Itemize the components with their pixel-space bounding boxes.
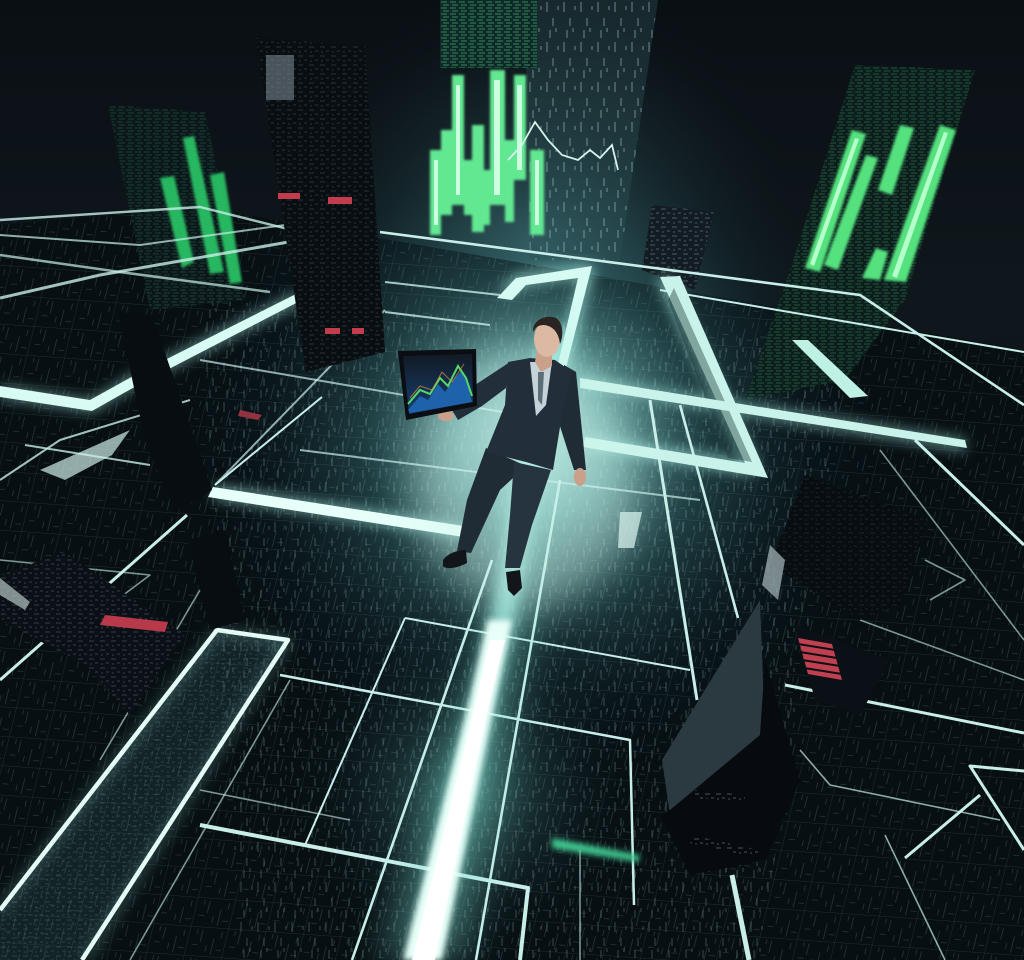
- building: lower right dark slab: [660, 600, 800, 875]
- shoes: [443, 550, 522, 596]
- jacket: [486, 358, 572, 470]
- hand right: [574, 468, 586, 486]
- arm right: [558, 365, 586, 470]
- neck and head: [533, 317, 562, 372]
- building: left green hologram tower: [108, 105, 245, 310]
- accents: green floor glow: [552, 512, 642, 862]
- shirt: [530, 362, 552, 416]
- figure: businesswoman with tablet: [398, 317, 586, 596]
- hand left: [438, 411, 454, 421]
- floor grid: thin glowing lines: [0, 207, 1024, 960]
- legs: [457, 448, 551, 568]
- building: red-lit server block: [795, 625, 890, 715]
- panel: large glass strip, lower left: [0, 630, 288, 960]
- building: mid left dark tower: [118, 312, 245, 630]
- arm left: [452, 362, 510, 420]
- building: right dark cube: [762, 475, 928, 620]
- building: top centre green hologram: [430, 0, 658, 260]
- tie: [538, 372, 544, 405]
- tablet: [398, 349, 477, 420]
- floor strips: bright bars: [0, 266, 967, 538]
- building: tall dark tower: [256, 38, 385, 372]
- building: small back tower: [642, 205, 714, 290]
- beam: central light path: [383, 330, 575, 960]
- line chart: [508, 122, 618, 170]
- glow: behind person: [415, 350, 635, 610]
- building: lower left machine block: [0, 410, 262, 715]
- building: right green hologram tower: [745, 65, 975, 400]
- floor glow lines: blur layer: [0, 270, 965, 960]
